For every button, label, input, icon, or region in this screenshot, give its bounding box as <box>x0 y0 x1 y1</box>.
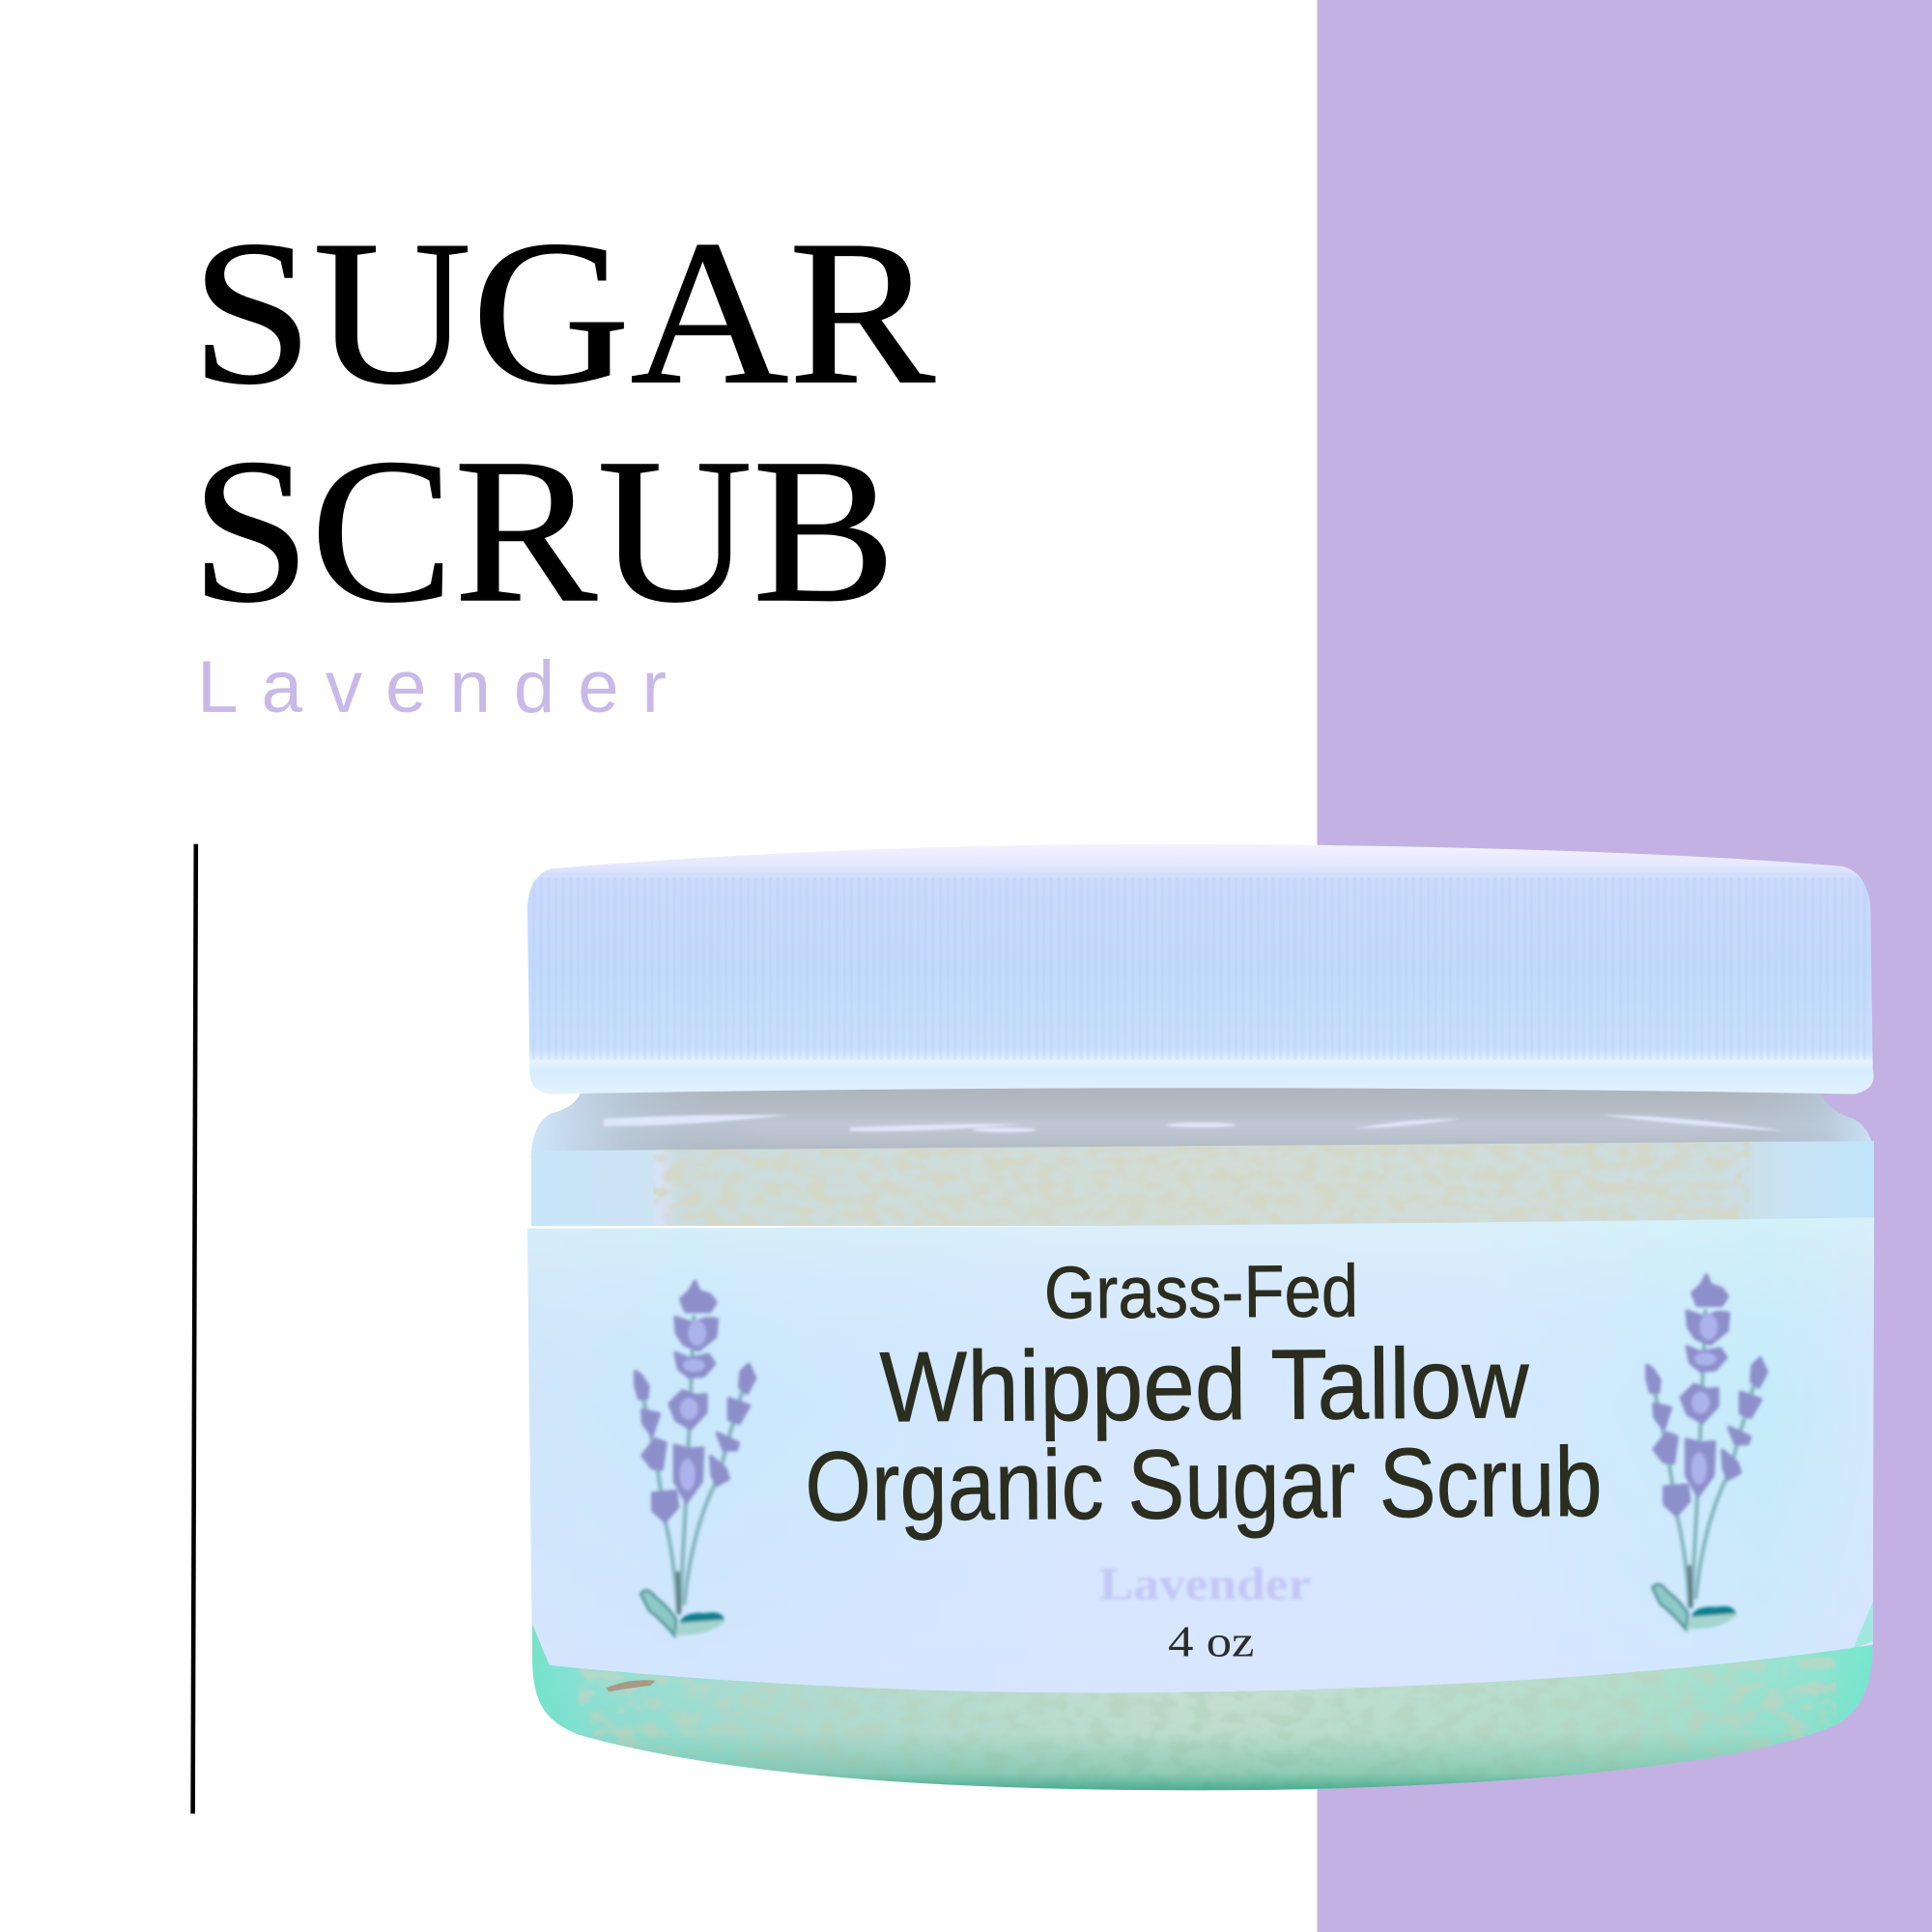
jar lid <box>527 844 1874 1094</box>
icon: lavender sprig right <box>1647 1275 1767 1630</box>
title: SUGAR SCRUB <box>191 198 935 645</box>
vertical black rule <box>193 844 196 1814</box>
panel: lavender purple column <box>1318 0 1932 1932</box>
label text <box>804 1249 1603 1542</box>
label text: Whipped Tallow <box>879 1326 1529 1442</box>
title: SUGAR SCRUB: SCRUB <box>191 416 895 645</box>
neck highlights <box>604 1115 1786 1132</box>
label text: Organic Sugar Scrub <box>805 1427 1603 1542</box>
jar body: visible scrub above label <box>531 1140 1874 1229</box>
product: jar of sugar scrub <box>527 844 1878 1799</box>
subtitle: Lavender: Lavender <box>197 646 667 728</box>
label text: Lavender (blurred): Lavender <box>1099 1560 1311 1610</box>
label text: 4 oz: 4 oz <box>1168 1616 1254 1665</box>
jar bottom: scrub and teal base <box>527 1638 1878 1799</box>
icon: lavender sprig left <box>636 1282 754 1635</box>
jar label <box>527 1217 1874 1692</box>
jar body: clear neck <box>531 1084 1874 1158</box>
label text: Grass-Fed <box>1044 1251 1358 1335</box>
title: SUGAR SCRUB: SUGAR <box>191 198 935 427</box>
